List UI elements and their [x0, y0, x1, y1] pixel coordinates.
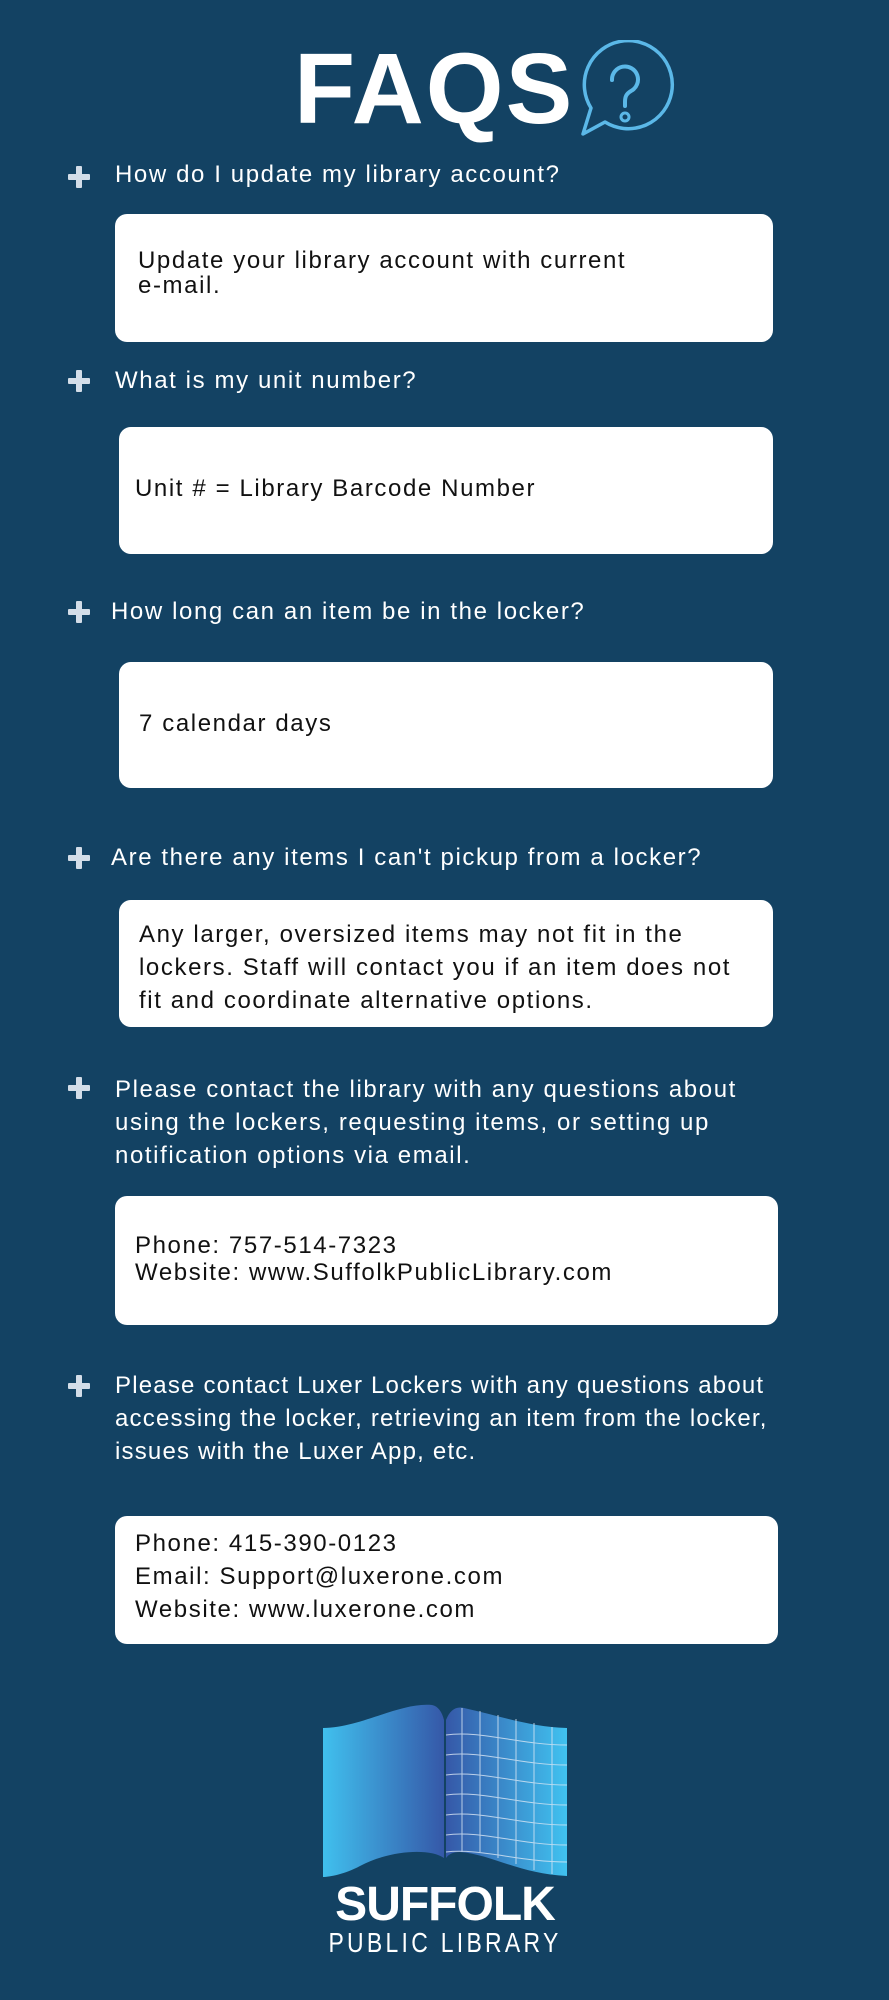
answer box 5: Website: www.SuffolkPublicLibrary.com — [135, 1259, 613, 1286]
icon: question speech bubble — [581, 40, 674, 136]
answer box 2 — [119, 427, 773, 554]
logo: Suffolk Public Library — [323, 1704, 567, 1958]
question 6: issues with the Luxer App, etc. — [115, 1438, 476, 1465]
question 6: Please contact Luxer Lockers with any questions about — [115, 1372, 764, 1399]
question 5: notification options via email. — [115, 1142, 471, 1169]
question 2: What is my unit number? — [115, 367, 417, 394]
logo: Suffolk Public Library: PUBLIC LIBRARY — [328, 1927, 562, 1958]
icon: plus 6 — [68, 1375, 90, 1397]
answer box 6: Website: www.luxerone.com — [135, 1596, 476, 1623]
answer box 6: Email: Support@luxerone.com — [135, 1563, 504, 1590]
question 5: using the lockers, requesting items, or setting up — [115, 1109, 710, 1136]
answer box 4 — [119, 900, 773, 1027]
answer box 4: fit and coordinate alternative options. — [139, 987, 594, 1014]
icon: plus 5 — [68, 1077, 90, 1099]
answer box 5: Phone: 757-514-7323 — [135, 1232, 398, 1259]
answer box 1: e-mail. — [138, 272, 221, 299]
answer box 5 — [115, 1196, 778, 1325]
icon: plus 4 — [68, 847, 90, 869]
answer box 4: Any larger, oversized items may not fit in the — [139, 921, 683, 948]
question 1: How do I update my library account? — [115, 161, 561, 188]
question 5 — [115, 1076, 737, 1169]
question 6 — [115, 1372, 768, 1465]
answer box 6 — [115, 1516, 778, 1644]
question 3: How long can an item be in the locker? — [111, 598, 585, 625]
question 5: Please contact the library with any questions about — [115, 1076, 737, 1103]
icon: plus 3 — [68, 601, 90, 623]
icon: open book — [323, 1704, 567, 1877]
question 4: Are there any items I can't pickup from a locker? — [111, 844, 702, 871]
answer box 3: 7 calendar days — [139, 710, 332, 737]
answer box 1: Update your library account with current — [138, 247, 626, 274]
answer box 1 — [115, 214, 773, 342]
logo text: SUFFOLK — [335, 1878, 555, 1931]
answer box 3 — [119, 662, 773, 788]
title: FAQS — [294, 33, 574, 145]
icon: plus 1 — [68, 166, 90, 188]
question 6: accessing the locker, retrieving an item from the locker, — [115, 1405, 768, 1432]
icon: plus 2 — [68, 370, 90, 392]
answer box 4: lockers. Staff will contact you if an item does not — [139, 954, 731, 981]
answer box 6: Phone: 415-390-0123 — [135, 1530, 398, 1557]
answer box 2: Unit # = Library Barcode Number — [135, 475, 536, 502]
